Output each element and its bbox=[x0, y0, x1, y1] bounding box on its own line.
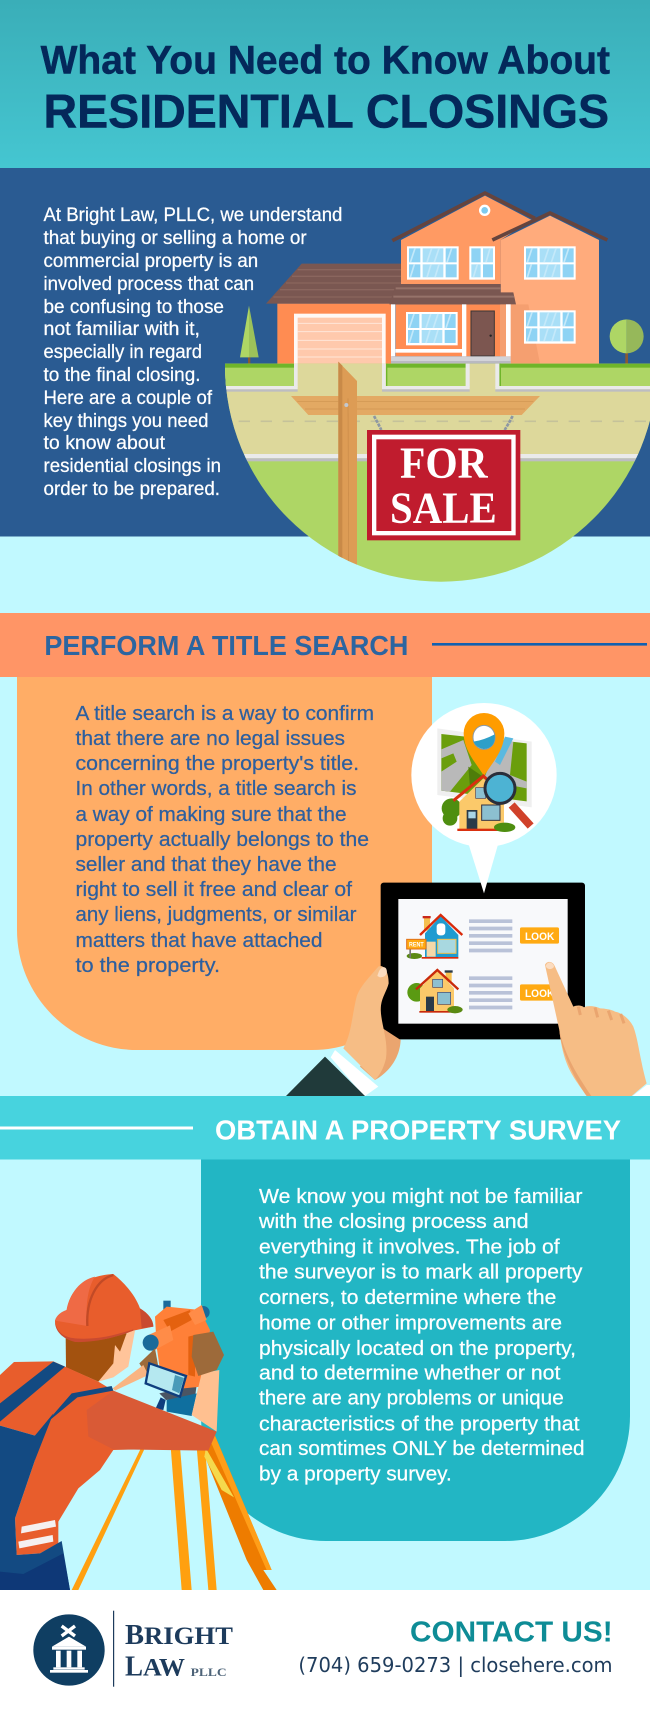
text block: intro paragraph: residential closings in bbox=[44, 455, 221, 477]
sleeve bbox=[87, 1391, 217, 1451]
button LOOK 1: LOOK bbox=[525, 931, 554, 943]
text block: property survey: the surveyor is to mark all property bbox=[259, 1262, 582, 1284]
icon: tablet bbox=[381, 883, 585, 1039]
panel: property survey text box bbox=[201, 1160, 630, 1541]
heading band: perform a title search bbox=[0, 613, 650, 677]
text block: title search: a way of making sure that the bbox=[76, 803, 346, 826]
icon: house bbox=[266, 193, 607, 364]
map bbox=[437, 728, 532, 807]
body bbox=[0, 1361, 140, 1555]
text block: property survey: and to determine whether or not bbox=[259, 1362, 561, 1384]
panel: header band bbox=[0, 0, 650, 168]
hard hat bbox=[55, 1274, 153, 1341]
text block: title search: In other words, a title search is bbox=[76, 777, 356, 800]
text block: title search: seller and that they have the bbox=[76, 853, 336, 876]
logo: courthouse emblem bbox=[33, 1614, 105, 1686]
text block: title search: property actually belongs to the bbox=[76, 828, 369, 851]
icon: speech bubble with map, pin and house bbox=[411, 703, 557, 893]
logo: wordmark: PLLC bbox=[191, 1665, 227, 1679]
logo: wordmark: B bbox=[125, 1619, 144, 1651]
post bbox=[338, 362, 357, 585]
lawns bbox=[225, 364, 294, 386]
listing 1 lines bbox=[469, 921, 512, 950]
icon: for sale sign bbox=[367, 416, 520, 540]
icon: round tree bbox=[610, 319, 644, 364]
text block: intro paragraph: not familiar with it, bbox=[44, 318, 200, 340]
sign text: FOR bbox=[400, 439, 489, 488]
listing 1 house bbox=[407, 915, 462, 959]
icon: surveyor with theodolite on tripod bbox=[0, 1274, 277, 1590]
logo: wordmark: L bbox=[125, 1650, 143, 1682]
text block: property survey: characteristics of the property that bbox=[259, 1414, 580, 1436]
text block: intro paragraph: order to be prepared. bbox=[44, 478, 220, 500]
title: RESIDENTIAL CLOSINGS bbox=[44, 84, 609, 137]
heading band: obtain a property survey bbox=[0, 1096, 650, 1160]
logo: wordmark: RIGHT bbox=[144, 1623, 233, 1650]
text block: property survey bbox=[258, 1186, 584, 1485]
text block: intro paragraph: key things you need bbox=[44, 410, 208, 432]
sign text: SALE bbox=[390, 483, 497, 532]
icon: left hand holding tablet bbox=[286, 966, 401, 1096]
instrument bbox=[163, 1301, 171, 1311]
panel: footer bbox=[0, 1590, 650, 1710]
sign text bbox=[390, 439, 497, 532]
yard circle with road and post bbox=[225, 362, 650, 582]
text block: intro paragraph: that buying or selling a home or bbox=[44, 227, 307, 249]
divider bbox=[113, 1611, 114, 1687]
tripod bbox=[72, 1447, 144, 1590]
text block: property survey: with the closing process and bbox=[258, 1211, 528, 1233]
button LOOK 1 bbox=[520, 927, 559, 944]
text block: property survey: by a property survey. bbox=[259, 1463, 452, 1485]
arms and gloves bbox=[139, 1348, 158, 1375]
walkway edges bbox=[294, 364, 298, 387]
button LOOK 2: LOOK bbox=[525, 988, 554, 1000]
logo: wordmark bbox=[125, 1619, 233, 1682]
reflective stripes bbox=[21, 1520, 56, 1533]
logo: wordmark: AW bbox=[143, 1654, 185, 1682]
text block: intro paragraph bbox=[44, 204, 342, 500]
text block: intro paragraph: especially in regard bbox=[44, 341, 202, 363]
instrument base bbox=[159, 1385, 197, 1400]
listing 1 house: RENT bbox=[409, 942, 424, 949]
magnifier bbox=[512, 805, 531, 826]
road dashes bbox=[238, 420, 646, 422]
garage bbox=[266, 264, 402, 304]
text block: title search: any liens, judgments, or similar bbox=[76, 903, 357, 926]
text block: title search: matters that have attached bbox=[76, 929, 322, 952]
text block: property survey: We know you might not be familiar bbox=[259, 1186, 583, 1208]
panel: title search text box bbox=[17, 677, 432, 1050]
text block: property survey: everything it involves. The job of bbox=[259, 1237, 560, 1259]
icon: right hand pointing at tablet bbox=[545, 962, 650, 1096]
listing 2 lines bbox=[469, 978, 512, 1007]
pin bbox=[464, 713, 504, 776]
icon: pine tree bbox=[240, 306, 259, 364]
text block: intro paragraph: Here are a couple of bbox=[44, 387, 213, 409]
text block: property survey: there are any problems or unique bbox=[259, 1388, 564, 1410]
text block: title search: A title search is a way to confirm bbox=[76, 702, 374, 725]
text block: intro paragraph: to the final closing. bbox=[44, 364, 200, 386]
contact details: (704) 659-0273 | closehere.com bbox=[298, 1653, 613, 1678]
text block: intro paragraph: be confusing to those bbox=[44, 296, 224, 318]
house bbox=[442, 798, 462, 818]
right wing bbox=[501, 216, 599, 364]
text block: title search: right to sell it free and clear of bbox=[76, 878, 352, 901]
beam bbox=[291, 396, 540, 415]
heading band: perform a title search: PERFORM A TITLE SEARCH bbox=[44, 630, 408, 661]
text block: title search bbox=[76, 702, 374, 977]
text block: intro paragraph: to know about bbox=[44, 432, 166, 454]
contact heading: CONTACT US! bbox=[410, 1616, 613, 1648]
heading band: obtain a property survey: OBTAIN A PROPERTY SURVEY bbox=[215, 1115, 621, 1146]
upper storey bbox=[401, 196, 532, 285]
head bbox=[66, 1333, 128, 1382]
text block: intro paragraph: commercial property is an bbox=[44, 250, 258, 272]
button LOOK 2 bbox=[520, 984, 559, 1001]
text block: title search: concerning the property's title. bbox=[76, 752, 359, 775]
text block: property survey: corners, to determine where the bbox=[259, 1287, 556, 1309]
text block: intro paragraph: At Bright Law, PLLC, we understand bbox=[44, 204, 342, 226]
listing 2 house bbox=[407, 970, 463, 1013]
title: What You Need to Know About bbox=[41, 38, 610, 82]
text block: property survey: physically located on the property, bbox=[259, 1338, 576, 1360]
porch bbox=[396, 304, 511, 356]
windows bbox=[407, 246, 459, 280]
text block: title search: that there are no legal issues bbox=[76, 727, 345, 750]
text block: title search: to the property. bbox=[76, 954, 220, 977]
text block: property survey: home or other improvements are bbox=[259, 1312, 562, 1334]
text block: intro paragraph: involved process that can bbox=[44, 273, 254, 295]
title bbox=[41, 38, 610, 137]
text block: property survey: can somtimes ONLY be determined bbox=[259, 1438, 584, 1460]
panel: intro background bbox=[0, 168, 650, 536]
screen bbox=[146, 1363, 186, 1397]
